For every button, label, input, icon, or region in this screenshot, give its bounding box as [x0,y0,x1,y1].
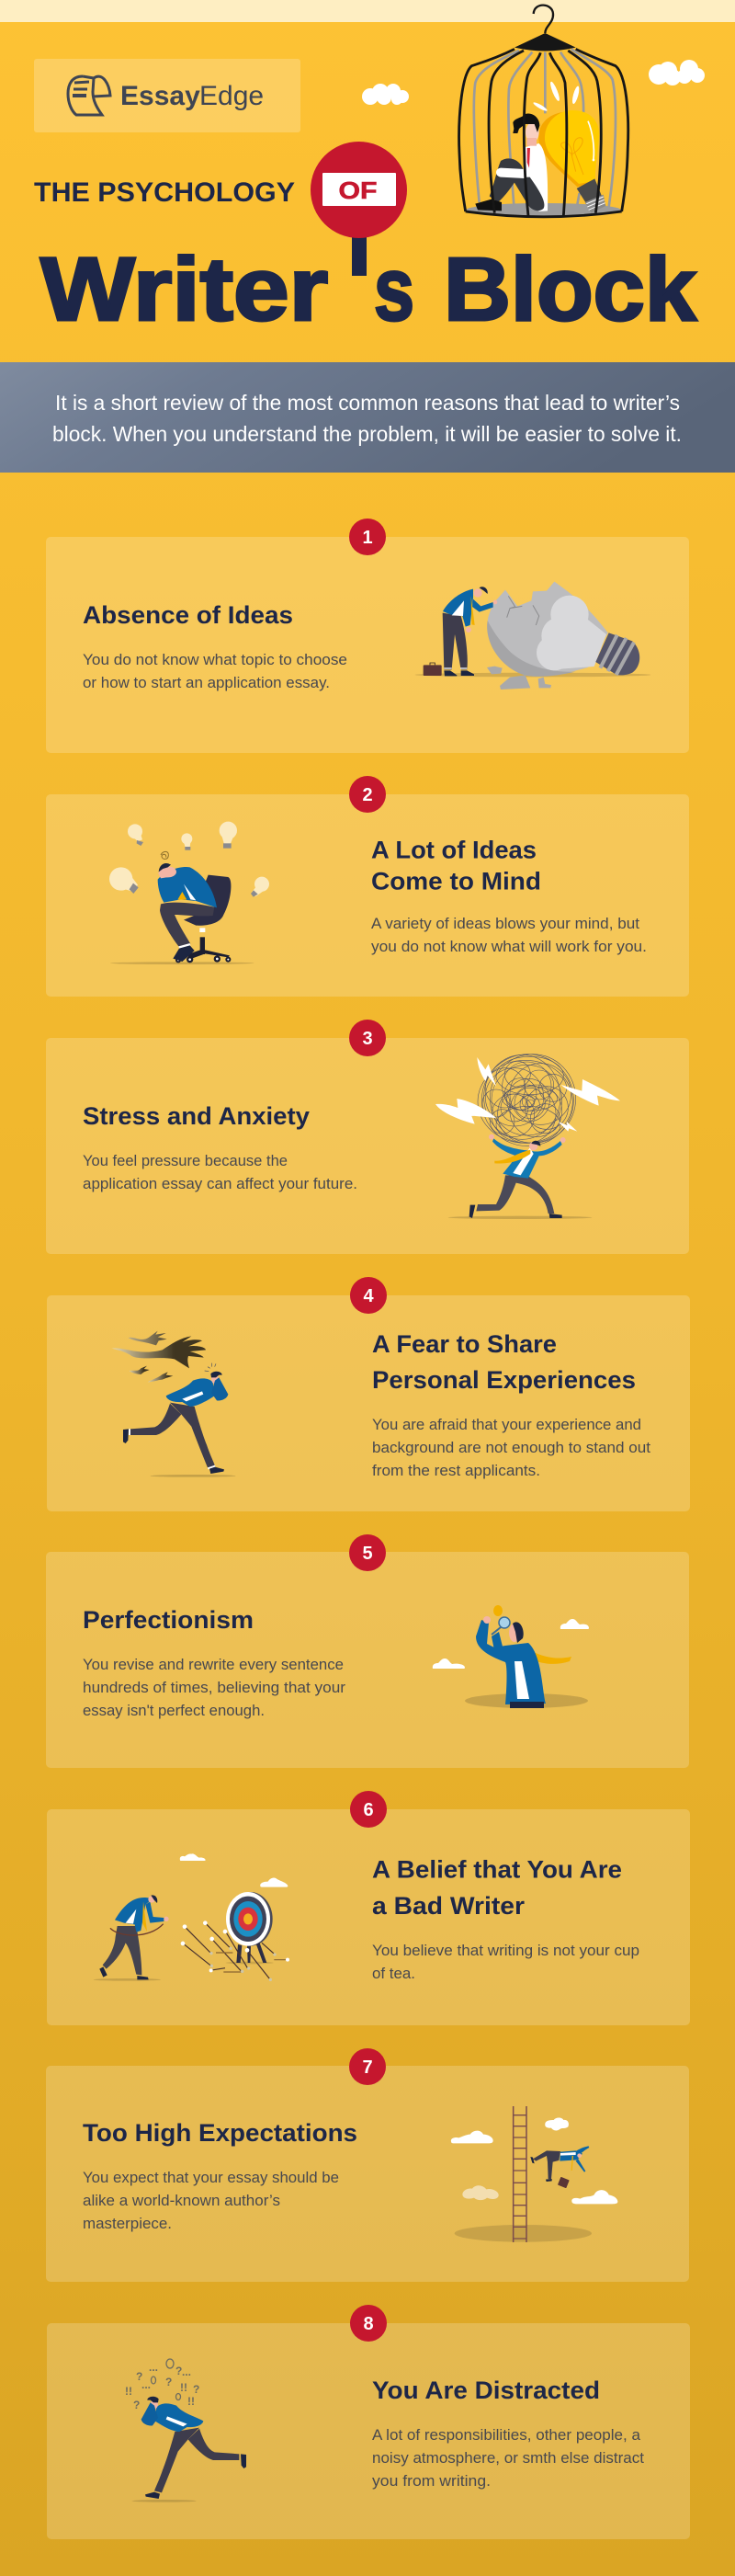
illustration: man running from hands [112,1331,236,1477]
illustration: ladder and falling man [451,2106,617,2242]
heading: writer's block: Block [444,239,697,339]
shadow hands [112,1336,206,1368]
logo panel [34,59,300,132]
number badge 3 [349,1020,386,1056]
panel: 4 a fear to share [47,1277,690,1511]
heading 4 [372,1330,636,1394]
floating symbols: ? [165,2376,172,2388]
number badge 6 [350,1791,387,1828]
number badge 2 [349,776,386,813]
heading 6 [372,1855,622,1920]
body 1: You do not know what topic to choose [83,651,347,668]
heading 1: Absence of Ideas [83,601,293,629]
panel: 8 you are distracted [47,2305,690,2539]
chair [184,875,231,926]
floating symbols: ... [141,2378,151,2391]
spark marks [532,81,581,112]
body 4 [372,1416,650,1479]
body 6: You believe that writing is not your cup [372,1942,639,1959]
floating symbols: !! [187,2395,195,2408]
illustration: man and bulb in cage [459,6,628,217]
man with bow [103,1926,141,1975]
heading 6: a Bad Writer [372,1892,525,1920]
body 8: noisy atmosphere, or smth else distract [372,2449,644,2467]
scribble ball [478,1054,576,1146]
floating symbols: ? [193,2383,199,2396]
body 8: A lot of responsibilities, other people, a [372,2426,641,2444]
body 2: you do not know what will work for you. [371,938,647,955]
number badge 8 [350,2305,387,2342]
panel: 6 belief bad writer [47,1791,690,2025]
number badge 4 [350,1277,387,1314]
logo wordmark: Edge [199,81,264,111]
body 7 [83,2169,339,2232]
floating symbols: ... [182,2365,191,2378]
heading: writer's block: s [374,239,414,339]
body 7: masterpiece. [83,2215,172,2232]
floating symbols: ? [175,2365,182,2377]
body 3 [83,1152,357,1192]
panel: 7 too high expectations [46,2048,689,2282]
body 3: application essay can affect your future. [83,1175,357,1192]
number badge 7: 7 [362,2057,373,2078]
front bars [459,49,628,217]
number badge 3: 3 [362,1029,373,1049]
body 3: You feel pressure because the [83,1152,288,1169]
heading 3: Stress and Anxiety [83,1102,310,1130]
icon: scroll logo [68,76,110,115]
logo wordmark: Essay [120,81,200,111]
arrows [181,1921,289,1981]
icon: large cloud [649,60,705,85]
heading 8: You Are Distracted [372,2377,600,2404]
heading 6: A Belief that You Are [372,1855,622,1883]
ladder [514,2106,526,2242]
floating symbols: !! [125,2385,132,2398]
panel: 5 perfectionism [46,1534,689,1768]
body 5 [83,1656,345,1719]
body 4: background are not enough to stand out [372,1439,650,1456]
icon: stop sign of: OF [338,177,377,204]
running man [123,1372,236,1477]
illustration: man inspecting bulb with magnifier [433,1605,589,1708]
body 6 [372,1942,639,1982]
man [476,1175,554,1214]
number badge 8: 8 [363,2314,374,2334]
number badge 5 [349,1534,386,1571]
body 5: hundreds of times, believing that your [83,1679,345,1696]
heading 4: A Fear to Share [372,1330,557,1358]
body 2 [371,915,647,955]
intro text [52,391,682,446]
number badge 2: 2 [362,785,373,805]
heading: writer's block [40,239,697,339]
body 2: A variety of ideas blows your mind, but [371,915,639,932]
falling man [533,2150,560,2179]
body 4: You are afraid that your experience and [372,1416,641,1433]
cage floor [467,203,621,217]
icon: stop sign of [311,142,407,276]
body 7: alike a world-known author’s [83,2192,280,2209]
floating symbols: ? [133,2399,140,2411]
intro band [0,362,735,473]
illustration: man carrying scribble ball [435,1054,620,1219]
number badge 5: 5 [362,1544,373,1564]
title [34,142,697,339]
man [160,903,214,947]
target [229,1892,273,1946]
body 8: you from writing. [372,2472,491,2490]
body 5: You revise and rewrite every sentence [83,1656,344,1673]
number badge 4: 4 [363,1286,374,1306]
intro text: block. When you understand the problem, it will be easier to solve it. [52,422,682,446]
falling briefcase [558,2177,570,2188]
icon: small cloud [362,84,409,105]
body 8 [372,2426,644,2490]
body 1: or how to start an application essay. [83,674,330,691]
heading 2 [371,837,541,895]
hook and roof [534,6,553,33]
intro text: It is a short review of the most common reasons that lead to writer’s [55,391,680,415]
body 4: from the rest applicants. [372,1462,540,1479]
floating bulbs [109,822,269,896]
clouds [433,1658,465,1669]
floating symbols: ... [149,2361,158,2374]
heading 4: Personal Experiences [372,1366,636,1394]
illustration: distracted running man [125,2359,246,2502]
illustration: broken bulb [415,582,650,690]
light bulb [538,110,605,213]
panel: 1 absence of ideas [46,519,689,753]
body 7: You expect that your essay should be [83,2169,339,2186]
clouds [451,2131,493,2143]
seated man [475,114,548,211]
heading 2: A Lot of Ideas [371,837,537,864]
panel: 3 stress and anxiety [46,1020,689,1254]
heading: writer's block: Writer [40,239,328,339]
body 5: essay isn't perfect enough. [83,1702,265,1719]
body 6: of tea. [372,1965,415,1982]
number badge 1: 1 [362,528,373,548]
number badge 1 [349,519,386,555]
number badge 6: 6 [363,1800,374,1820]
number badge 7 [349,2048,386,2085]
top strip [0,0,735,22]
heading 7: Too High Expectations [83,2119,357,2147]
illustration: man on chair with bulbs [109,822,269,964]
heading 5: Perfectionism [83,1606,254,1634]
heading: the psychology: THE PSYCHOLOGY [34,177,295,208]
body 1 [83,651,347,691]
floating symbols: !! [180,2381,187,2394]
floating symbols: ? [136,2370,142,2383]
lightning bolts [435,1057,620,1132]
clouds [180,1853,206,1861]
back bars [474,49,616,207]
heading 2: Come to Mind [371,868,541,895]
illustration: archer and target [94,1853,289,1981]
panel: 2 a lot of ideas [46,776,689,997]
floating symbols [125,2361,199,2411]
